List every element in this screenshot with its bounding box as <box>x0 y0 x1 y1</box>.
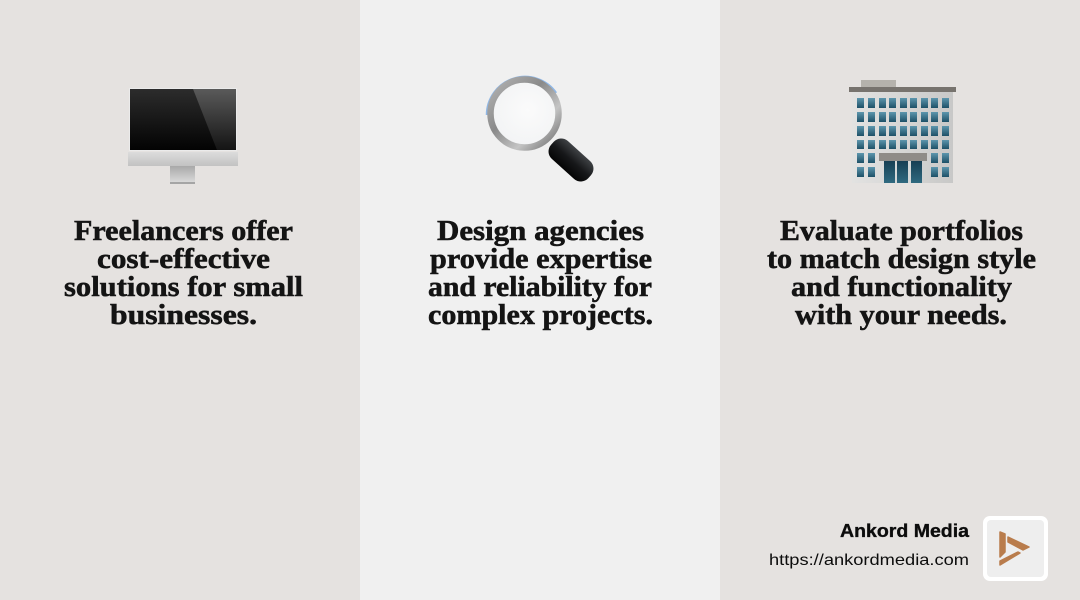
panel: design agencies <box>360 0 720 600</box>
icon: magnifying glass <box>487 77 598 186</box>
icon: brand logo <box>983 516 1048 581</box>
icon: desktop monitor <box>128 88 238 184</box>
heading: evaluate portfolios text: with your needs. <box>795 299 1007 331</box>
panel: freelancers <box>0 0 360 600</box>
heading: evaluate portfolios text: to match design style <box>767 243 1036 275</box>
heading: freelancers text <box>64 215 303 331</box>
icon: office building <box>849 80 956 183</box>
heading: design agencies text <box>428 215 653 331</box>
heading: freelancers text: businesses. <box>110 299 257 331</box>
brand name: Ankord Media <box>840 521 970 541</box>
heading: design agencies text: provide expertise <box>430 243 652 275</box>
heading: evaluate portfolios text <box>767 215 1036 331</box>
heading: freelancers text: Freelancers offer <box>74 215 293 247</box>
heading: evaluate portfolios text: Evaluate portfolios <box>780 215 1023 247</box>
brand footer <box>769 516 1048 581</box>
heading: evaluate portfolios text: and functionality <box>791 271 1013 303</box>
heading: freelancers text: solutions for small <box>64 271 303 303</box>
heading: freelancers text: cost-effective <box>97 243 270 275</box>
panel: evaluate portfolios <box>720 0 1080 600</box>
heading: design agencies text: Design agencies <box>437 215 644 247</box>
heading: design agencies text: complex projects. <box>428 299 653 331</box>
heading: design agencies text: and reliability for <box>428 271 652 303</box>
brand url: https://ankordmedia.com <box>769 552 969 569</box>
